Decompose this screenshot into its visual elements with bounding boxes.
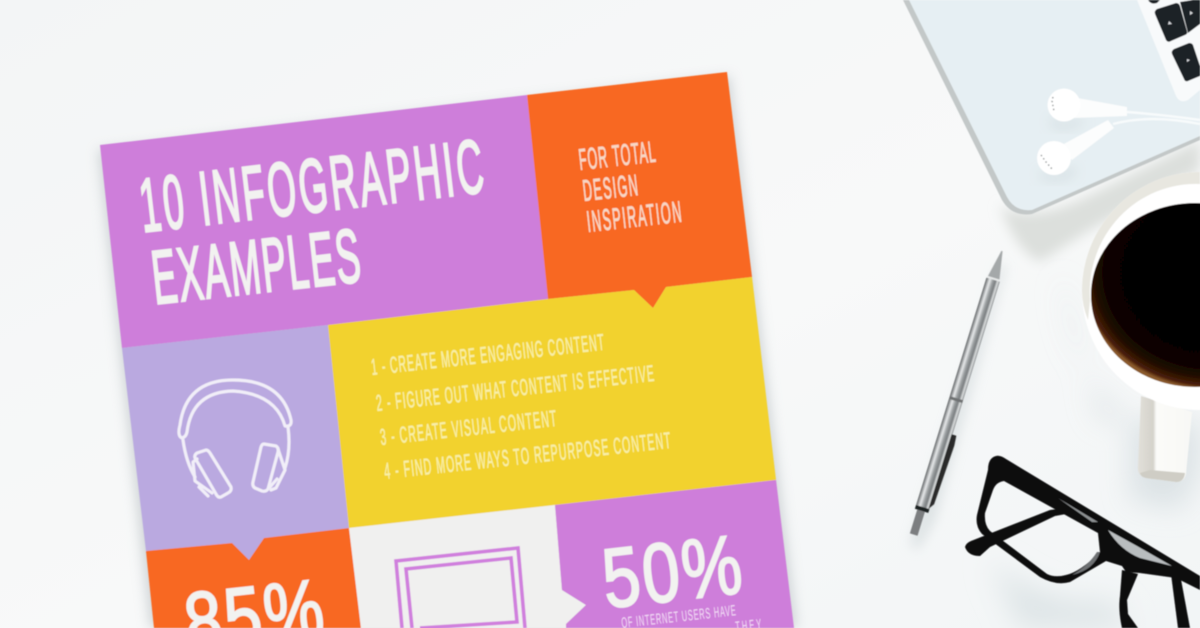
- front frame: [977, 456, 1200, 590]
- content list: 3 - CREATE VISUAL CONTENT: [379, 405, 558, 450]
- cup handle: [1138, 396, 1192, 482]
- content list: 1 - CREATE MORE ENGAGING CONTENT: [370, 329, 605, 380]
- panel: yellow list: [328, 277, 776, 528]
- panel: lavender headphones: [122, 325, 349, 560]
- panel: white frame: [349, 505, 586, 628]
- panel: orange subtitle: [527, 72, 752, 308]
- icon: headphones: [179, 380, 291, 497]
- photo: pen: [907, 249, 1013, 538]
- keys: [1148, 0, 1200, 81]
- subtitle: [577, 134, 683, 238]
- infographic paper: [100, 72, 794, 628]
- content list: 2 - FIGURE OUT WHAT CONTENT IS EFFECTIVE: [375, 360, 655, 416]
- title: 10 INFOGRAPHIC: [135, 123, 488, 248]
- earbuds: [1037, 88, 1200, 181]
- key arrows: [1168, 11, 1193, 62]
- subtitle: DESIGN: [581, 168, 639, 207]
- photo: soft shadows: [910, 140, 1200, 628]
- infographic paper shadow: [98, 76, 797, 628]
- content list: [370, 329, 672, 484]
- lens reflection: [1108, 530, 1172, 566]
- content list: 4 - FIND MORE WAYS TO REPURPOSE CONTENT: [383, 427, 672, 484]
- panel: orange 85 percent: [146, 528, 361, 628]
- subtitle: INSPIRATION: [585, 194, 683, 238]
- icon: picture frame: [396, 548, 525, 628]
- panel: purple 50 percent: [555, 480, 794, 628]
- title: EXAMPLES: [147, 213, 364, 320]
- title: [135, 123, 488, 320]
- subtitle: FOR TOTAL: [577, 134, 657, 176]
- panel: title purple: [100, 95, 548, 348]
- photo: laptop with keyboard: [903, 0, 1200, 214]
- stat: 50 percent: 50%: [598, 518, 746, 627]
- photo: glasses: [965, 456, 1200, 628]
- photo: coffee cup: [1082, 172, 1200, 482]
- temple arm: [965, 508, 1066, 556]
- keyboard well: [1137, 0, 1200, 101]
